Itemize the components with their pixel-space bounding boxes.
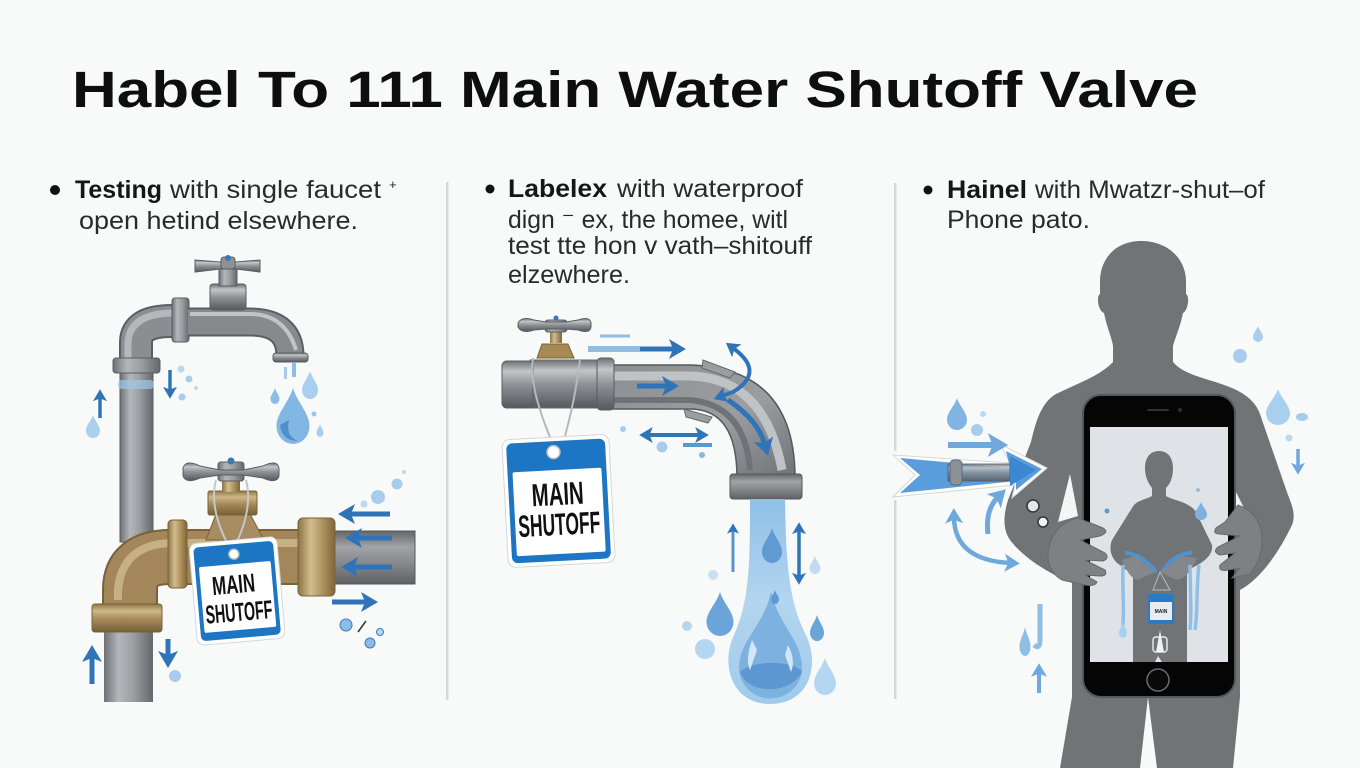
text block: hainel: with Mwatzr-shut–of	[1034, 176, 1265, 204]
text block: testing: open hetind elsewhere.	[79, 207, 358, 235]
water drops from faucet	[86, 363, 324, 444]
text block: testing: with single faucet	[169, 176, 381, 204]
arrows on upper pipe	[100, 370, 170, 418]
text block: labelex: elzewhere.	[508, 261, 630, 289]
tag: main shutoff: SHUTOFF	[204, 594, 274, 630]
photo on phone screen: person with tag	[1104, 451, 1212, 662]
hands holding phone	[1048, 505, 1262, 586]
photo on phone screen: person with tag: MAIN	[1155, 609, 1168, 615]
text block: labelex	[486, 175, 812, 289]
tag: main shutoff large: MAIN	[531, 475, 585, 513]
text block: testing: +	[389, 177, 397, 192]
illustration: upper chrome faucet	[113, 255, 308, 542]
gaps between arms and torso	[1058, 474, 1250, 522]
panel: testing with faucet	[50, 176, 415, 702]
illustration: brass shutoff valve	[92, 458, 415, 702]
flow arrows and bubbles at valve	[92, 470, 406, 684]
text block: testing: Testing	[75, 176, 162, 204]
tag: main shutoff	[189, 536, 285, 646]
blue arrows and drops around the person	[947, 326, 1308, 693]
tag: main shutoff large: SHUTOFF	[517, 505, 601, 544]
flow arrows along pipe	[588, 336, 799, 577]
arrow with pipe entering arm	[893, 444, 1047, 498]
title: Habel To 111 Main Water Shutoff Valve	[72, 61, 1198, 118]
water stream and drops	[620, 426, 836, 704]
text block: hainel	[924, 176, 1265, 234]
text block: labelex: with waterproof	[616, 175, 803, 203]
text block: labelex: test tte hon v vath–shitouff	[508, 232, 812, 260]
panel: labelex with waterproof sign	[486, 175, 836, 704]
text block: testing	[50, 176, 397, 235]
icon: phone	[1083, 395, 1235, 697]
text block: labelex: Labelex	[508, 175, 607, 203]
tag: main shutoff large	[502, 434, 615, 568]
tag: main shutoff: MAIN	[211, 567, 256, 601]
text block: hainel: Hainel	[947, 176, 1027, 204]
panel: hainel with phone photo	[893, 176, 1308, 768]
text block: labelex: dign ⁻ ex, the homee, witl	[508, 206, 788, 234]
silhouette: person	[1004, 241, 1294, 768]
illustration: horizontal faucet with elbow	[502, 316, 802, 499]
text block: hainel: Phone pato.	[947, 206, 1090, 234]
